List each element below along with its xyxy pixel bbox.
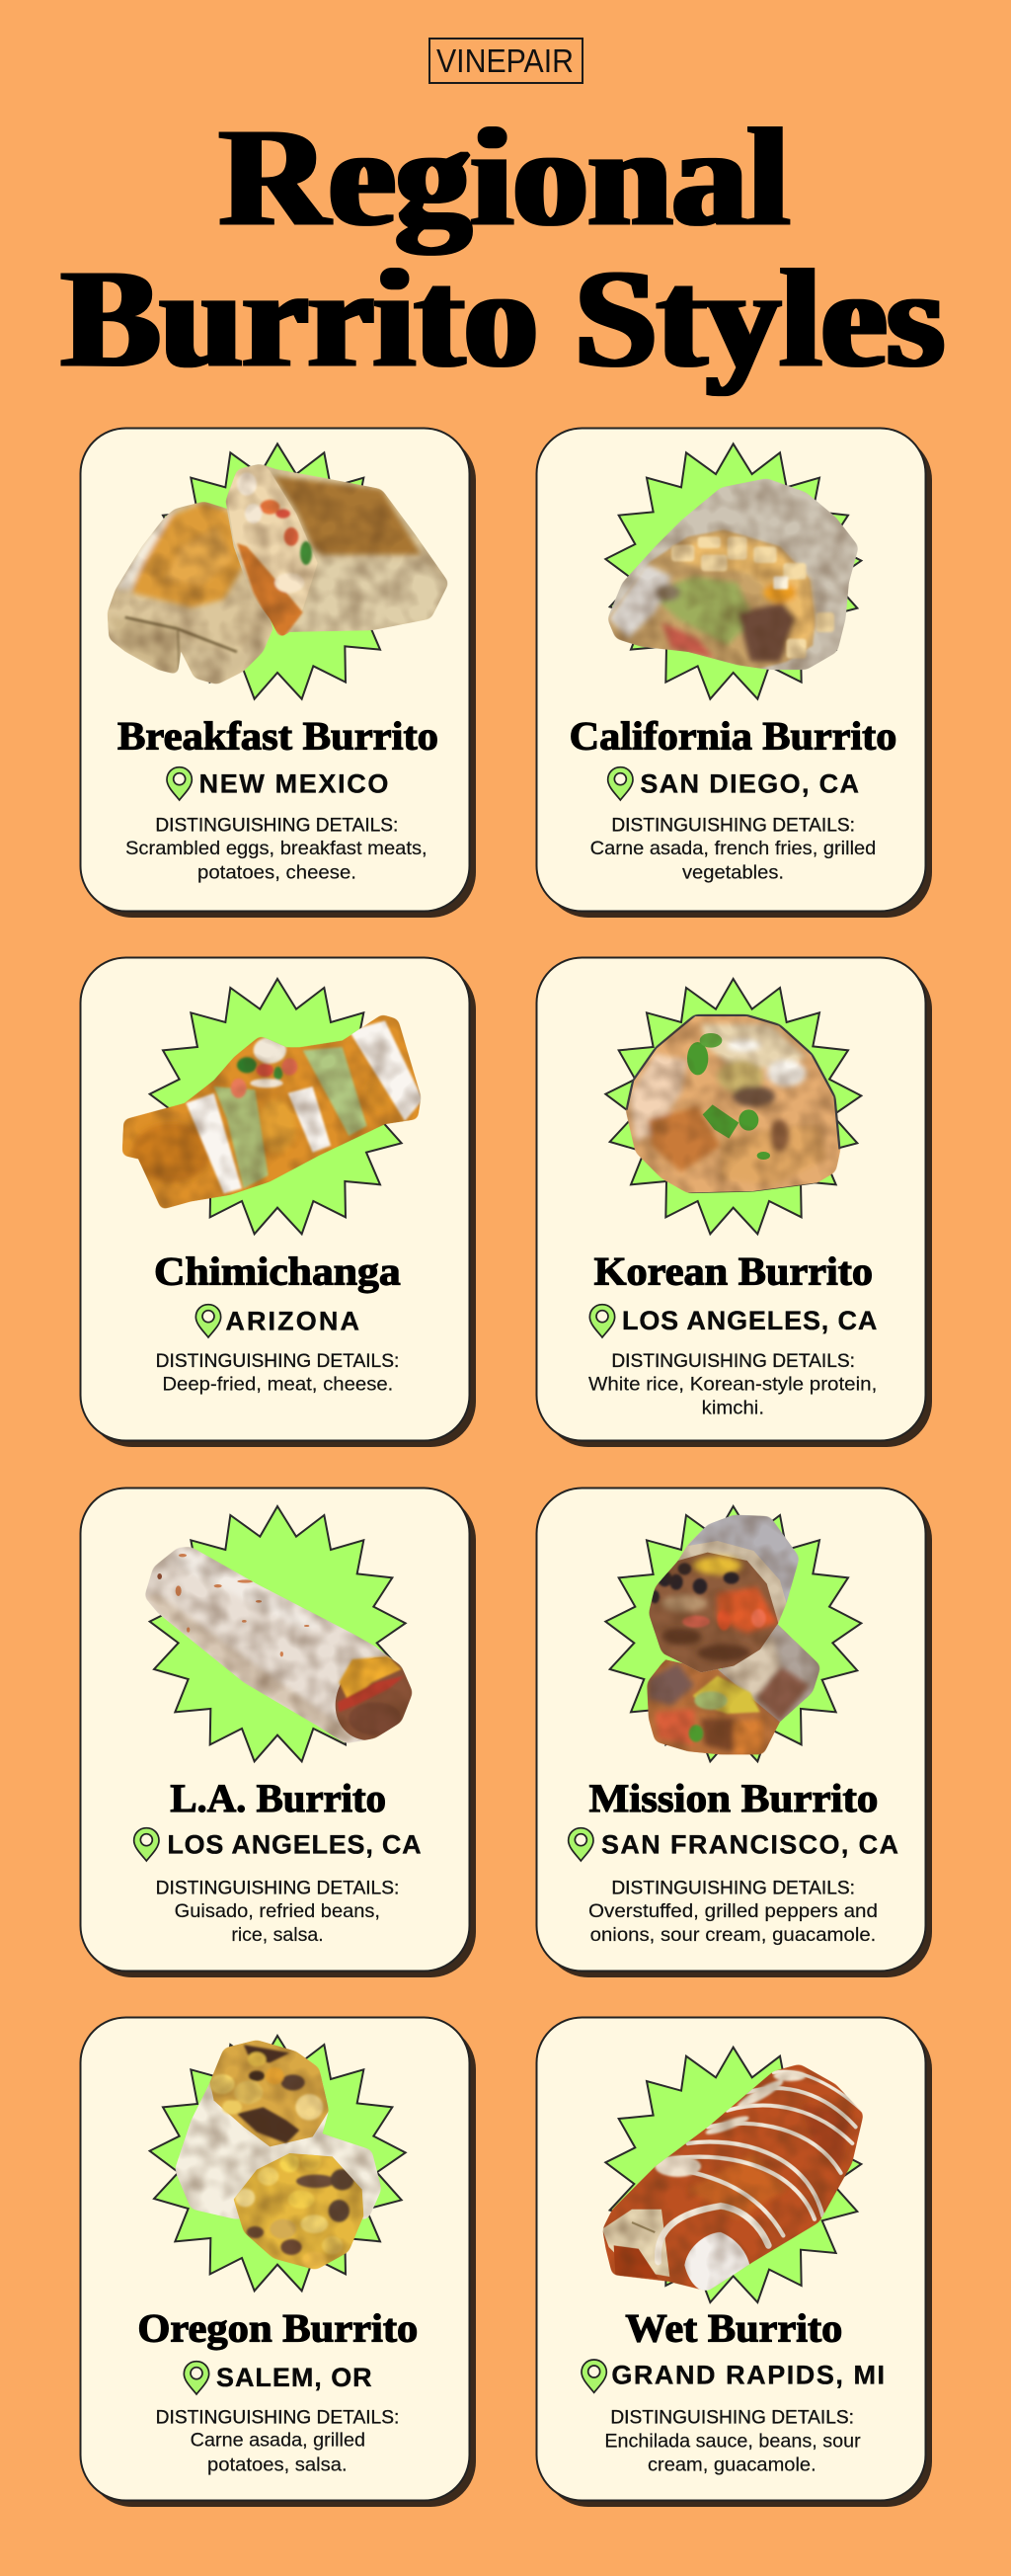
panel: Breakfast Burrito bbox=[81, 429, 476, 918]
burrito photo: wet bbox=[599, 2061, 869, 2294]
panel: Wet Burrito bbox=[537, 2017, 932, 2507]
details: rice, salsa. bbox=[231, 1925, 324, 1946]
starburst bbox=[150, 2036, 406, 2291]
burrito photo: chimichanga bbox=[118, 1010, 425, 1212]
details: Overstuffed, grilled peppers and bbox=[588, 1901, 878, 1922]
starburst bbox=[605, 979, 861, 1234]
title: Breakfast Burrito bbox=[117, 713, 438, 758]
title: Mission Burrito bbox=[589, 1776, 878, 1820]
panel: Oregon Burrito bbox=[81, 2017, 476, 2507]
title: Korean Burrito bbox=[594, 1249, 873, 1294]
burrito photo: mission bbox=[642, 1511, 826, 1758]
location: SAN DIEGO, CA bbox=[640, 768, 859, 798]
title: California Burrito bbox=[570, 713, 896, 758]
location: LOS ANGELES, CA bbox=[622, 1306, 877, 1335]
title: Wet Burrito bbox=[625, 2306, 842, 2351]
details bbox=[156, 1877, 399, 1946]
starburst bbox=[605, 443, 861, 699]
burrito photo: L.A. bbox=[145, 1547, 413, 1743]
burrito photo: breakfast bbox=[102, 461, 454, 688]
details bbox=[588, 1350, 877, 1419]
panel: Mission Burrito bbox=[537, 1488, 932, 1977]
details: DISTINGUISHING DETAILS: bbox=[155, 815, 398, 837]
details: White rice, Korean-style protein, bbox=[588, 1375, 877, 1396]
details: Scrambled eggs, breakfast meats, bbox=[125, 839, 428, 859]
location: GRAND RAPIDS, MI bbox=[611, 2360, 885, 2389]
location: SALEM, OR bbox=[216, 2363, 372, 2392]
details: DISTINGUISHING DETAILS: bbox=[611, 815, 855, 837]
details bbox=[156, 1350, 399, 1396]
title: Burrito Styles bbox=[61, 240, 944, 396]
details bbox=[590, 815, 876, 883]
details: DISTINGUISHING DETAILS: bbox=[156, 2406, 399, 2428]
details: vegetables. bbox=[682, 862, 784, 883]
location: SAN FRANCISCO, CA bbox=[601, 1830, 898, 1860]
details bbox=[156, 2406, 399, 2476]
title: Chimichanga bbox=[154, 1249, 401, 1294]
starburst bbox=[150, 1506, 406, 1761]
starburst bbox=[150, 979, 406, 1234]
burrito photo: california bbox=[602, 474, 866, 675]
details: DISTINGUISHING DETAILS: bbox=[610, 2406, 854, 2428]
details: Deep-fried, meat, cheese. bbox=[162, 1375, 393, 1396]
location: NEW MEXICO bbox=[199, 768, 388, 798]
details: DISTINGUISHING DETAILS: bbox=[611, 1877, 855, 1898]
title bbox=[61, 99, 944, 396]
panel: California Burrito bbox=[537, 429, 932, 918]
location: ARIZONA bbox=[225, 1307, 359, 1336]
panel: Korean Burrito bbox=[537, 958, 932, 1447]
panel: Chimichanga bbox=[81, 958, 476, 1447]
details: Carne asada, grilled bbox=[191, 2431, 365, 2452]
starburst bbox=[605, 1506, 861, 1761]
burrito photo: oregon bbox=[171, 2038, 385, 2275]
logo: VinePair: VINEPAIR bbox=[436, 42, 574, 79]
details: DISTINGUISHING DETAILS: bbox=[611, 1350, 855, 1372]
panel: L.A. Burrito bbox=[81, 1488, 476, 1977]
details: potatoes, cheese. bbox=[197, 862, 356, 883]
details: cream, guacamole. bbox=[648, 2455, 817, 2476]
details: potatoes, salsa. bbox=[207, 2455, 348, 2476]
details: Enchilada sauce, beans, sour bbox=[604, 2431, 861, 2452]
details bbox=[588, 1877, 878, 1946]
details: kimchi. bbox=[702, 1399, 764, 1419]
details: Carne asada, french fries, grilled bbox=[590, 839, 876, 859]
burrito photo: korean bbox=[622, 1010, 846, 1195]
details bbox=[125, 815, 428, 883]
location: LOS ANGELES, CA bbox=[167, 1830, 422, 1860]
details: onions, sour cream, guacamole. bbox=[590, 1925, 876, 1946]
title: Regional bbox=[219, 99, 790, 255]
details: DISTINGUISHING DETAILS: bbox=[156, 1350, 399, 1372]
details bbox=[604, 2406, 861, 2476]
title: L.A. Burrito bbox=[170, 1776, 386, 1820]
details: DISTINGUISHING DETAILS: bbox=[156, 1877, 399, 1898]
title: Oregon Burrito bbox=[137, 2306, 418, 2351]
starburst bbox=[605, 2048, 861, 2302]
details: Guisado, refried beans, bbox=[175, 1901, 380, 1922]
starburst bbox=[150, 443, 406, 699]
